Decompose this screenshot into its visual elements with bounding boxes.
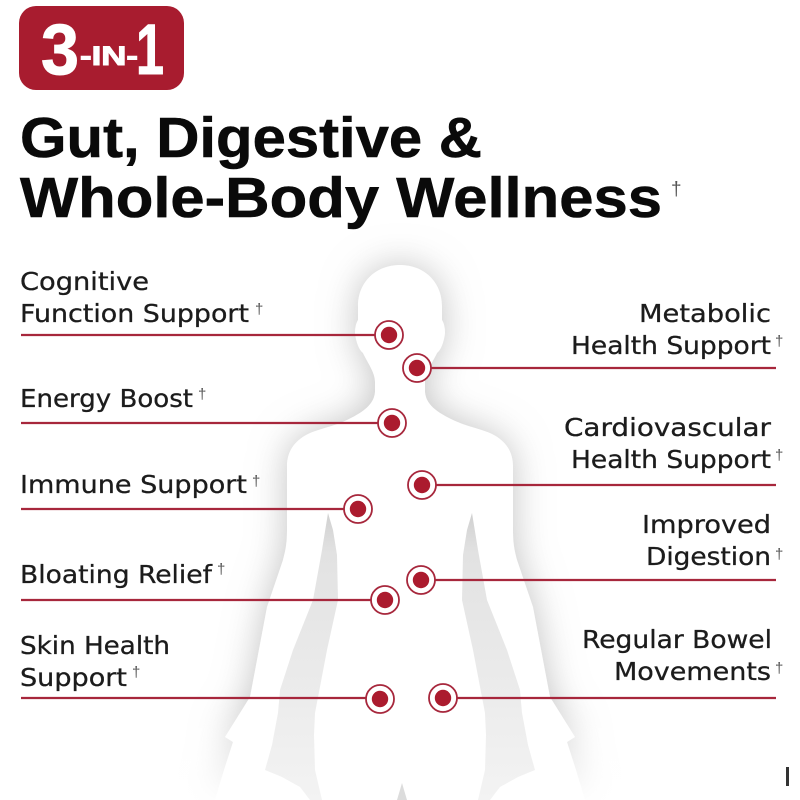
callout: metabolic health support xyxy=(403,299,783,382)
callout: energy boost: Energy Boost xyxy=(20,384,193,413)
callout: improved digestion: Improved xyxy=(642,510,771,539)
callout: bloating relief xyxy=(20,560,399,614)
body silhouette xyxy=(150,265,650,800)
callout: bloating relief: † xyxy=(217,561,225,578)
callout: improved digestion: Digestion xyxy=(646,542,771,571)
callout: improved digestion xyxy=(407,510,783,594)
callout: immune support: Immune Support xyxy=(20,470,247,499)
callout: regular bowel movements xyxy=(429,625,783,712)
callout: cognitive function support: Cognitive xyxy=(20,267,149,296)
callout: immune support xyxy=(20,470,372,523)
left arm gap xyxy=(265,513,338,800)
callout: energy boost: † xyxy=(198,386,206,403)
title: † xyxy=(671,179,682,200)
callout: improved digestion: † xyxy=(775,546,783,563)
title: Whole-Body Wellness xyxy=(20,166,662,230)
callout: cardiovascular health support xyxy=(408,413,783,499)
callout: metabolic health support: † xyxy=(775,333,783,350)
callout: regular bowel movements: † xyxy=(775,660,783,677)
badge: 3-in-1: 3 xyxy=(41,11,79,90)
right arm gap xyxy=(462,513,535,800)
callout: cognitive function support: Function Support xyxy=(20,299,249,328)
callout: skin health support: Skin Health xyxy=(20,631,170,660)
callout: cognitive function support: † xyxy=(255,301,263,318)
callout: immune support: † xyxy=(252,473,260,490)
callout: cardiovascular health support: Health Support xyxy=(571,445,771,474)
badge: 3-in-1 xyxy=(19,6,184,90)
callout: regular bowel movements: Movements xyxy=(614,657,771,686)
callout: regular bowel movements: Regular Bowel xyxy=(582,625,772,654)
badge: 3-in-1: 1 xyxy=(136,11,164,90)
callout: bloating relief: Bloating Relief xyxy=(20,560,213,589)
callout: cardiovascular health support: † xyxy=(775,447,783,464)
callout: energy boost xyxy=(20,384,406,437)
callout: skin health support xyxy=(20,631,394,713)
callout: cognitive function support xyxy=(20,267,403,349)
callout: metabolic health support: Health Support xyxy=(571,331,771,360)
callout: metabolic health support: Metabolic xyxy=(639,299,771,328)
badge: 3-in-1: -IN- xyxy=(80,41,138,71)
title xyxy=(20,106,682,230)
callout: skin health support: Support xyxy=(20,663,127,692)
callout: skin health support: † xyxy=(132,664,140,681)
title: Gut, Digestive & xyxy=(20,106,482,170)
callout: cardiovascular health support: Cardiovascular xyxy=(564,413,772,442)
cropped mark bottom right xyxy=(786,767,789,786)
leg gap xyxy=(397,783,407,800)
